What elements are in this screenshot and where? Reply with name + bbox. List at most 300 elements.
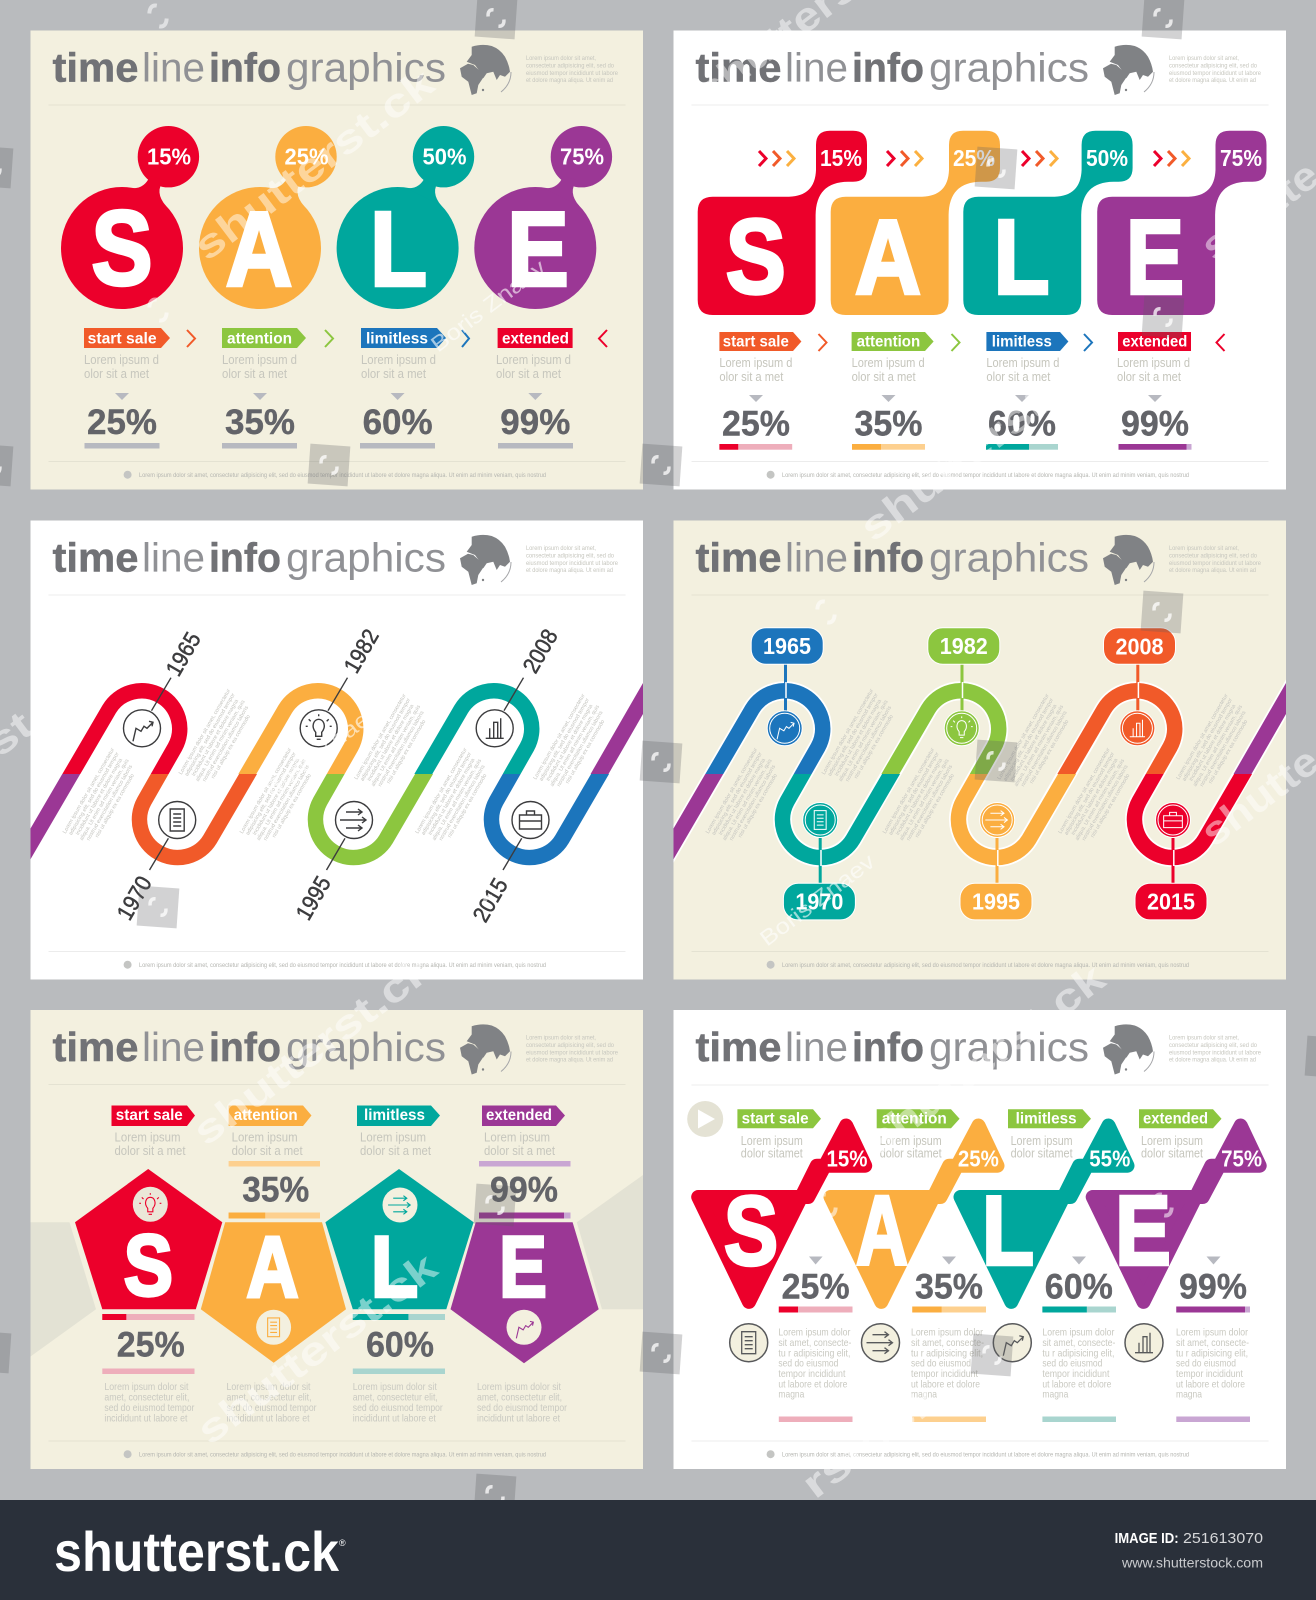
footer note: Lorem ipsum dolor sit amet, consectetur adipisicing elit, sed do eiusmod tempor incididunt ut labore et dolore magna aliqua. Ut enim ad minim veniam, quis nostrud <box>139 1452 546 1458</box>
column: extended: magna <box>1176 1389 1202 1401</box>
milestone 2015 <box>1135 802 1207 920</box>
rotated small text blocks: incididunt ut labore et dolore magna <box>718 757 767 836</box>
watermark text: rstock <box>794 1375 949 1507</box>
header: title, globe, intro text: line <box>142 44 205 90</box>
column: extended: Lorem ipsum dolor <box>1176 1326 1248 1338</box>
column: attention: attention <box>227 330 292 347</box>
rotated small text blocks: nisi ut aliquip ex ea commodo <box>565 719 606 785</box>
E circle with 75% bubble: 75% <box>560 144 604 170</box>
column: limitless: limitless <box>364 1107 425 1124</box>
milestone 1970: 1970 <box>795 888 843 914</box>
column: extended: Lorem ipsum dolor sit <box>477 1381 561 1393</box>
rotated small text blocks: nisi ut aliquip ex ea commodo <box>271 773 313 839</box>
column: limitless: limitless <box>366 330 428 347</box>
column: start sale: 25% <box>117 1326 185 1364</box>
rotated small text blocks <box>62 688 613 850</box>
watermark text: shutterst.ck <box>852 339 1112 550</box>
milestone 1965 <box>124 628 206 747</box>
header: title, globe, intro text: graphics <box>929 534 1089 580</box>
rotated small text blocks: Lorem ipsum dolor sit amet, consectetur <box>997 693 1051 781</box>
A pentagon <box>201 1220 346 1363</box>
panel: SALE rounded squares <box>674 30 1286 490</box>
watermark text: Boris Znaev <box>755 849 879 951</box>
E pentagon: E <box>499 1220 547 1316</box>
L circle with 50% bubble: L <box>370 190 427 308</box>
header: title, globe, intro text <box>48 534 626 596</box>
column: extended: extended <box>502 330 569 347</box>
column: start sale <box>730 1109 852 1422</box>
rotated small text blocks: Lorem ipsum dolor sit amet, consectetur <box>1058 747 1112 835</box>
A circle with 25% bubble: A <box>226 190 292 308</box>
column: start sale: 25% <box>782 1267 850 1306</box>
L pentagon: L <box>371 1220 418 1316</box>
E circle with 75% bubble: E <box>507 190 569 308</box>
S block with 15% tab: S <box>726 198 786 316</box>
column: attention: 35% <box>854 405 922 444</box>
column: attention: olor sit a met <box>852 370 916 384</box>
A pentagon: A <box>246 1220 298 1316</box>
watermark hook marks <box>147 5 1174 1216</box>
column: limitless <box>360 328 469 448</box>
A circle with 25% bubble <box>199 126 337 309</box>
column: attention: dolor sit a met <box>232 1144 303 1158</box>
milestone 2008: 2008 <box>1116 634 1164 660</box>
rotated small text blocks: nostrud exercitation ullamco laboris <box>263 764 311 842</box>
column: start sale: Lorem ipsum d <box>84 353 159 367</box>
column: limitless: limitless <box>1016 1110 1077 1127</box>
header: title, globe, intro text: graphics <box>929 44 1089 90</box>
rotated small text blocks: nostrud exercitation ullamco laboris <box>1081 764 1130 842</box>
rotated small text blocks: incididunt ut labore et dolore magna <box>252 757 301 836</box>
milestone 1982: 1982 <box>940 633 988 659</box>
rotated small text blocks: aliqua. Ut enim ad minim veniam, quis <box>79 758 131 842</box>
panel: SALE triangles <box>674 1010 1286 1469</box>
rotated small text blocks: nisi ut aliquip ex ea commodo <box>94 773 136 839</box>
rotated small text blocks: adipisicing elit, sed do eiusmod tempor <box>827 692 880 778</box>
rotated small text blocks: nostrud exercitation ullamco laboris <box>1199 710 1248 788</box>
column: attention: amet, consectetur elit, <box>226 1392 312 1404</box>
A triangle <box>830 1126 999 1302</box>
column: extended: tu r adipisicing elit, <box>1176 1347 1248 1359</box>
column: start sale: Lorem ipsum <box>114 1130 180 1144</box>
header: title, globe, intro text: info <box>209 534 281 580</box>
column: extended <box>1117 332 1224 450</box>
S circle with 15% bubble: S <box>92 190 152 308</box>
background band <box>30 1175 643 1356</box>
column: start sale: dolor sitamet <box>741 1146 803 1160</box>
header: title, globe, intro text <box>48 44 626 106</box>
rotated small text blocks: aliqua. Ut enim ad minim veniam, quis <box>431 758 483 842</box>
rotated small text blocks: nisi ut aliquip ex ea commodo <box>386 719 427 785</box>
column: extended: olor sit a met <box>1117 370 1181 384</box>
column: attention: Lorem ipsum d <box>222 353 297 367</box>
column: start sale <box>719 332 826 450</box>
milestone 1965: 1965 <box>160 628 206 680</box>
watermark text: shutterst.ck <box>185 945 442 1154</box>
column: limitless: amet, consectetur elit, <box>353 1392 438 1404</box>
column: extended: amet, consectetur elit, <box>477 1392 562 1404</box>
footer note <box>48 951 626 969</box>
column: start sale: sed do eiusmod tempor <box>104 1402 195 1414</box>
rotated small text blocks: adipisicing elit, sed do eiusmod tempor <box>245 751 298 837</box>
header: title, globe, intro text: line <box>142 1024 205 1070</box>
L triangle: 55% <box>1089 1146 1130 1172</box>
rotated small text blocks: nostrud exercitation ullamco laboris <box>729 764 777 842</box>
column: limitless: olor sit a met <box>361 367 426 381</box>
header: title, globe, intro text: info <box>209 44 281 90</box>
column: start sale <box>102 1106 195 1424</box>
footer note: Lorem ipsum dolor sit amet, consectetur adipisicing elit, sed do eiusmod tempor incididunt ut labore et dolore magna aliqua. Ut enim ad minim veniam, quis nostrud <box>782 963 1189 969</box>
logo registered mark: ® <box>339 1538 346 1548</box>
rotated small text blocks: adipisicing elit, sed do eiusmod tempor <box>888 751 941 837</box>
rotated small text blocks: nisi ut aliquip ex ea commodo <box>1090 773 1131 839</box>
S circle with 15% bubble <box>61 126 199 309</box>
header: title, globe, intro text: consectetur adipisicing elit, sed do <box>1169 64 1258 70</box>
column: start sale: amet, consectetur elit, <box>104 1392 189 1404</box>
column: limitless: 60% <box>366 1326 434 1364</box>
column: limitless <box>993 1109 1116 1422</box>
E circle with 75% bubble <box>474 126 612 309</box>
rotated small text blocks: aliqua. Ut enim ad minim veniam, quis <box>549 704 601 788</box>
column: attention <box>222 328 333 448</box>
milestone 2008 <box>1104 628 1176 746</box>
column: attention: attention <box>234 1107 298 1124</box>
rotated small text blocks: nisi ut aliquip ex ea commodo <box>447 773 488 839</box>
header: title, globe, intro text: line <box>785 44 848 90</box>
header: title, globe, intro text: line <box>142 534 205 580</box>
column: extended <box>477 1106 570 1424</box>
column: attention: olor sit a met <box>222 367 287 381</box>
milestone 2008 <box>476 625 563 747</box>
watermark text: Boris Znaev <box>260 699 384 801</box>
header: title, globe, intro text: eiusmod tempor incididunt ut labore <box>1169 561 1262 567</box>
rotated small text blocks: incididunt ut labore et dolore magna <box>1010 703 1059 782</box>
A block with 25% tab <box>831 131 1000 316</box>
S triangle: S <box>724 1175 778 1285</box>
header: title, globe, intro text: Lorem ipsum dolor sit amet, <box>526 56 596 62</box>
rotated small text blocks: aliqua. Ut enim ad minim veniam, quis <box>838 699 890 783</box>
column: start sale: olor sit a met <box>84 367 149 381</box>
winding road with white outline <box>674 680 1286 867</box>
column: limitless: tempor incididunt <box>1042 1368 1109 1380</box>
L circle with 50% bubble <box>337 126 474 309</box>
rotated small text blocks: aliqua. Ut enim ad minim veniam, quis <box>1192 704 1244 788</box>
rotated small text blocks: incididunt ut labore et dolore magna <box>1071 757 1120 836</box>
column: start sale: 25% <box>722 405 790 444</box>
S block with 15% tab: 15% <box>820 145 862 171</box>
watermark text: shutterst.ck <box>186 60 443 269</box>
column: attention: tempor incididunt <box>911 1368 978 1380</box>
rotated small text blocks: aliqua. Ut enim ad minim veniam, quis <box>1074 758 1126 842</box>
header: title, globe, intro text: time <box>52 534 138 580</box>
footer note: Lorem ipsum dolor sit amet, consectetur adipisicing elit, sed do eiusmod tempor incididunt ut labore et dolore magna aliqua. Ut enim ad minim veniam, quis nostrud <box>139 473 546 479</box>
footer note: Lorem ipsum dolor sit amet, consectetur adipisicing elit, sed do eiusmod tempor incididunt ut labore et dolore magna aliqua. Ut enim ad minim veniam, quis nostrud <box>782 1452 1189 1458</box>
footer note: Lorem ipsum dolor sit amet, consectetur adipisicing elit, sed do eiusmod tempor incididunt ut labore et dolore magna aliqua. Ut enim ad minim veniam, quis nostrud <box>782 473 1189 479</box>
E triangle: E <box>1115 1175 1171 1285</box>
icon: play button <box>687 1101 723 1137</box>
L circle with 50% bubble: 50% <box>422 144 466 170</box>
column: attention: dolor sitamet <box>880 1146 942 1160</box>
column: attention: incididunt ut labore et <box>226 1412 310 1424</box>
column: extended: Lorem ipsum d <box>1117 356 1190 370</box>
header: title, globe, intro text <box>692 534 1268 596</box>
rotated small text blocks: Lorem ipsum dolor sit amet, consectetur <box>882 747 936 835</box>
milestone 2015: 2015 <box>467 874 513 926</box>
column: extended: extended <box>1143 1110 1208 1127</box>
header: title, globe, intro text: info <box>852 44 924 90</box>
column: attention: sit amet, consecte- <box>911 1337 984 1349</box>
column: extended: extended <box>1122 334 1187 351</box>
column: start sale: start sale <box>723 334 789 351</box>
column: extended <box>496 328 607 448</box>
column: limitless <box>986 332 1092 450</box>
column: extended: sit amet, consecte- <box>1176 1337 1249 1349</box>
rotated small text blocks: aliqua. Ut enim ad minim veniam, quis <box>1013 704 1065 788</box>
footer logo: shutterst.ck <box>54 1520 340 1583</box>
column: attention: tu r adipisicing elit, <box>911 1347 983 1359</box>
rotated small text blocks: nostrud exercitation ullamco laboris <box>1020 710 1069 788</box>
column: limitless <box>353 1106 445 1424</box>
L block with 50% tab <box>963 131 1133 316</box>
column: start sale: olor sit a met <box>719 370 784 384</box>
header: title, globe, intro text: et dolore magna aliqua. Ut enim ad <box>526 78 613 84</box>
column: start sale: sit amet, consecte- <box>778 1337 852 1349</box>
column: start sale: Lorem ipsum <box>741 1134 803 1148</box>
footer bar <box>0 1500 1316 1600</box>
column: limitless: 60% <box>1045 1267 1113 1306</box>
header: title, globe, intro text: Lorem ipsum dolor sit amet, <box>1169 1036 1239 1042</box>
column: attention: 35% <box>915 1267 983 1306</box>
header: title, globe, intro text <box>692 1024 1268 1086</box>
column: limitless: dolor sit a met <box>360 1144 431 1158</box>
A triangle: 25% <box>958 1146 999 1172</box>
column: extended: sed do eiusmod <box>1176 1358 1236 1370</box>
column: extended <box>1125 1109 1250 1422</box>
column: attention: sed do eiusmod <box>911 1358 971 1370</box>
winding road <box>30 683 643 866</box>
rotated small text blocks: Lorem ipsum dolor sit amet, consectetur <box>1175 693 1230 781</box>
L pentagon <box>325 1169 474 1316</box>
header: title, globe, intro text: eiusmod tempor incididunt ut labore <box>526 561 619 567</box>
rotated small text blocks: aliqua. Ut enim ad minim veniam, quis <box>256 758 308 842</box>
footer note: Lorem ipsum dolor sit amet, consectetur adipisicing elit, sed do eiusmod tempor incididunt ut labore et dolore magna aliqua. Ut enim ad minim veniam, quis nostrud <box>139 963 546 969</box>
column: start sale: start sale <box>88 330 157 347</box>
header: title, globe, intro text: consectetur adipisicing elit, sed do <box>526 554 615 560</box>
header: title, globe, intro text: Lorem ipsum dolor sit amet, <box>1169 56 1239 62</box>
column: extended: sed do eiusmod tempor <box>477 1402 567 1414</box>
header: title, globe, intro text: consectetur adipisicing elit, sed do <box>1169 554 1258 560</box>
column: attention: Lorem ipsum dolor sit <box>226 1381 311 1393</box>
milestone 2015: 2015 <box>1147 888 1195 914</box>
header: title, globe, intro text: info <box>852 534 924 580</box>
rotated small text blocks: adipisicing elit, sed do eiusmod tempor <box>68 751 121 837</box>
E triangle: 75% <box>1221 1146 1262 1172</box>
panel: winding timeline with year pills <box>653 520 1303 980</box>
rotated small text blocks: aliqua. Ut enim ad minim veniam, quis <box>899 758 951 842</box>
header: title, globe, intro text: Lorem ipsum dolor sit amet, <box>526 1036 596 1042</box>
watermark text: shutte <box>1193 153 1316 269</box>
rotated small text blocks: incididunt ut labore et dolore magna <box>895 757 944 836</box>
footer note <box>692 461 1268 479</box>
column: extended: dolor sit a met <box>484 1144 555 1158</box>
milestone 1982 <box>300 625 384 747</box>
E triangle <box>1093 1126 1262 1302</box>
rotated small text blocks: nostrud exercitation ullamco laboris <box>377 710 426 788</box>
rotated small text blocks: Lorem ipsum dolor sit amet, consectetur <box>821 688 875 776</box>
header: title, globe, intro text: et dolore magna aliqua. Ut enim ad <box>526 568 613 574</box>
header: title, globe, intro text: time <box>696 44 782 90</box>
milestone 2015 <box>467 802 549 926</box>
column: limitless: limitless <box>992 334 1052 351</box>
A circle with 25% bubble: 25% <box>284 144 328 170</box>
header: title, globe, intro text: consectetur adipisicing elit, sed do <box>1169 1043 1258 1049</box>
milestone 2008: 2008 <box>517 625 563 677</box>
rotated small text blocks: aliqua. Ut enim ad minim veniam, quis <box>722 758 774 842</box>
rotated small text blocks: incididunt ut labore et dolore magna <box>191 698 240 777</box>
S triangle: 15% <box>826 1146 868 1172</box>
header: title, globe, intro text: line <box>785 1024 848 1070</box>
rotated small text blocks: aliqua. Ut enim ad minim veniam, quis <box>370 704 422 788</box>
L triangle: L <box>982 1175 1034 1285</box>
rotated small text blocks: Lorem ipsum dolor sit amet, consectetur <box>354 693 408 781</box>
header: title, globe, intro text: time <box>52 44 138 90</box>
S triangle <box>698 1126 868 1302</box>
rotated small text blocks: nostrud exercitation ullamco laboris <box>202 705 250 783</box>
header: title, globe, intro text: eiusmod tempor incididunt ut labore <box>1169 71 1262 77</box>
header: title, globe, intro text: line <box>785 534 848 580</box>
rotated small text blocks: nostrud exercitation ullamco laboris <box>845 705 893 783</box>
header: title, globe, intro text: consectetur adipisicing elit, sed do <box>526 1043 615 1049</box>
column: limitless: incididunt ut labore et <box>353 1412 436 1424</box>
column: extended: tempor incididunt <box>1176 1368 1243 1380</box>
column: start sale <box>84 328 195 448</box>
header: title, globe, intro text <box>692 44 1268 106</box>
rotated small text blocks: incididunt ut labore et dolore magna <box>428 757 477 836</box>
rotated small text blocks: adipisicing elit, sed do eiusmod tempor <box>711 751 764 837</box>
header: title, globe, intro text: time <box>696 534 782 580</box>
footer note <box>692 1440 1268 1458</box>
S pentagon <box>75 1169 222 1314</box>
header: title, globe, intro text <box>48 1024 626 1085</box>
column: limitless: 60% <box>988 405 1056 444</box>
milestone 1970 <box>111 802 196 924</box>
column: extended: 99% <box>1121 405 1189 444</box>
header: title, globe, intro text: graphics <box>286 534 446 580</box>
column: attention: attention <box>882 1110 947 1127</box>
header: title, globe, intro text: eiusmod tempor incididunt ut labore <box>1169 1050 1262 1056</box>
header: title, globe, intro text: et dolore magna aliqua. Ut enim ad <box>1169 1058 1256 1064</box>
rotated small text blocks: adipisicing elit, sed do eiusmod tempor <box>1064 751 1116 837</box>
header: title, globe, intro text: consectetur adipisicing elit, sed do <box>526 64 615 70</box>
column: start sale: Lorem ipsum d <box>719 356 792 370</box>
column: attention: magna <box>911 1389 937 1401</box>
rotated small text blocks: incididunt ut labore et dolore magna <box>545 703 595 782</box>
rotated small text blocks: incididunt ut labore et dolore magna <box>367 703 416 782</box>
image id: IMAGE ID: <box>1115 1530 1179 1547</box>
milestone 1982: 1982 <box>338 625 384 677</box>
rotated small text blocks: Lorem ipsum dolor sit amet, consectetur <box>178 688 232 776</box>
A block with 25% tab: 25% <box>953 145 995 171</box>
E block with 75% tab <box>1097 131 1266 316</box>
header: title, globe, intro text: et dolore magna aliqua. Ut enim ad <box>526 1058 613 1064</box>
column: limitless: Lorem ipsum d <box>986 356 1059 370</box>
L triangle <box>960 1126 1130 1302</box>
S pentagon: S <box>124 1218 173 1314</box>
column: extended: ut labore et dolore <box>1176 1378 1245 1390</box>
header: title, globe, intro text: graphics <box>929 1024 1089 1070</box>
column: limitless: olor sit a met <box>986 370 1051 384</box>
rotated small text blocks: nostrud exercitation ullamco laboris <box>86 764 134 842</box>
column: attention <box>226 1106 320 1424</box>
header: title, globe, intro text: info <box>852 1024 924 1070</box>
rotated small text blocks: nostrud exercitation ullamco laboris <box>438 764 487 842</box>
column: start sale: sed do eiusmod <box>778 1358 839 1370</box>
rotated small text blocks: nisi ut aliquip ex ea commodo <box>853 714 895 780</box>
rotated small text blocks: incididunt ut labore et dolore magna <box>1188 703 1238 782</box>
footer note <box>692 951 1268 969</box>
column: limitless: tu r adipisicing elit, <box>1042 1347 1114 1359</box>
column: limitless: sit amet, consecte- <box>1042 1337 1116 1349</box>
column: attention: Lorem ipsum <box>232 1130 298 1144</box>
panel: SALE circles <box>30 30 643 490</box>
header: title, globe, intro text: time <box>696 1024 782 1070</box>
column: limitless: sed do eiusmod <box>1042 1358 1103 1370</box>
column: limitless: Lorem ipsum <box>1011 1134 1073 1148</box>
column: extended: 99% <box>1179 1267 1247 1306</box>
rotated small text blocks: adipisicing elit, sed do eiusmod tempor <box>1003 697 1055 783</box>
header: title, globe, intro text: time <box>52 1024 138 1070</box>
column: limitless: Lorem ipsum <box>360 1130 426 1144</box>
watermark text: Boris Znaev <box>426 255 550 357</box>
column: attention: Lorem ipsum dolor <box>911 1326 983 1338</box>
column: limitless: Lorem ipsum dolor sit <box>353 1381 437 1393</box>
column: start sale: 25% <box>87 403 157 442</box>
watermark text: shutterst.ck <box>189 1244 446 1453</box>
column: limitless: Lorem ipsum d <box>361 353 436 367</box>
column: start sale: Lorem ipsum dolor <box>778 1326 851 1338</box>
rotated small text blocks: incididunt ut labore et dolore magna <box>75 757 124 836</box>
rotated small text blocks: Lorem ipsum dolor sit amet, consectetur <box>415 747 469 835</box>
milestone 1965 <box>751 628 823 746</box>
column: extended: olor sit a met <box>496 367 561 381</box>
header: title, globe, intro text: eiusmod tempor incididunt ut labore <box>526 71 619 77</box>
rotated small text blocks: nisi ut aliquip ex ea commodo <box>1029 719 1070 785</box>
A triangle: A <box>856 1175 908 1285</box>
column: limitless: ut labore et dolore <box>1042 1378 1112 1390</box>
column: attention: ut labore et dolore <box>911 1378 980 1390</box>
column: extended: dolor sitamet <box>1141 1146 1203 1160</box>
watermark text: shutterst.ck <box>857 955 1114 1164</box>
milestone 1982 <box>928 628 1000 746</box>
E block with 75% tab: 75% <box>1220 145 1262 171</box>
column: limitless: dolor sitamet <box>1011 1146 1073 1160</box>
column: attention: Lorem ipsum <box>880 1134 942 1148</box>
rotated small text blocks: adipisicing elit, sed do eiusmod tempor <box>360 697 412 783</box>
column: attention: sed do eiusmod tempor <box>226 1402 317 1414</box>
panel: winding timeline with angled years <box>10 520 660 980</box>
rotated small text blocks: Lorem ipsum dolor sit amet, consectetur <box>62 747 116 835</box>
rotated small text blocks: Lorem ipsum dolor sit amet, consectetur <box>239 747 293 835</box>
header: title, globe, intro text: info <box>209 1024 281 1070</box>
column: limitless: magna <box>1042 1389 1069 1401</box>
L block with 50% tab: L <box>994 198 1050 316</box>
S circle with 15% bubble: 15% <box>147 144 191 170</box>
column: start sale: start sale <box>742 1110 809 1127</box>
column: start sale: ut labore et dolore <box>778 1378 848 1390</box>
rotated small text blocks: nisi ut aliquip ex ea commodo <box>1208 719 1249 785</box>
column: start sale: Lorem ipsum dolor sit <box>104 1381 188 1393</box>
header: title, globe, intro text: eiusmod tempor incididunt ut labore <box>526 1050 619 1056</box>
